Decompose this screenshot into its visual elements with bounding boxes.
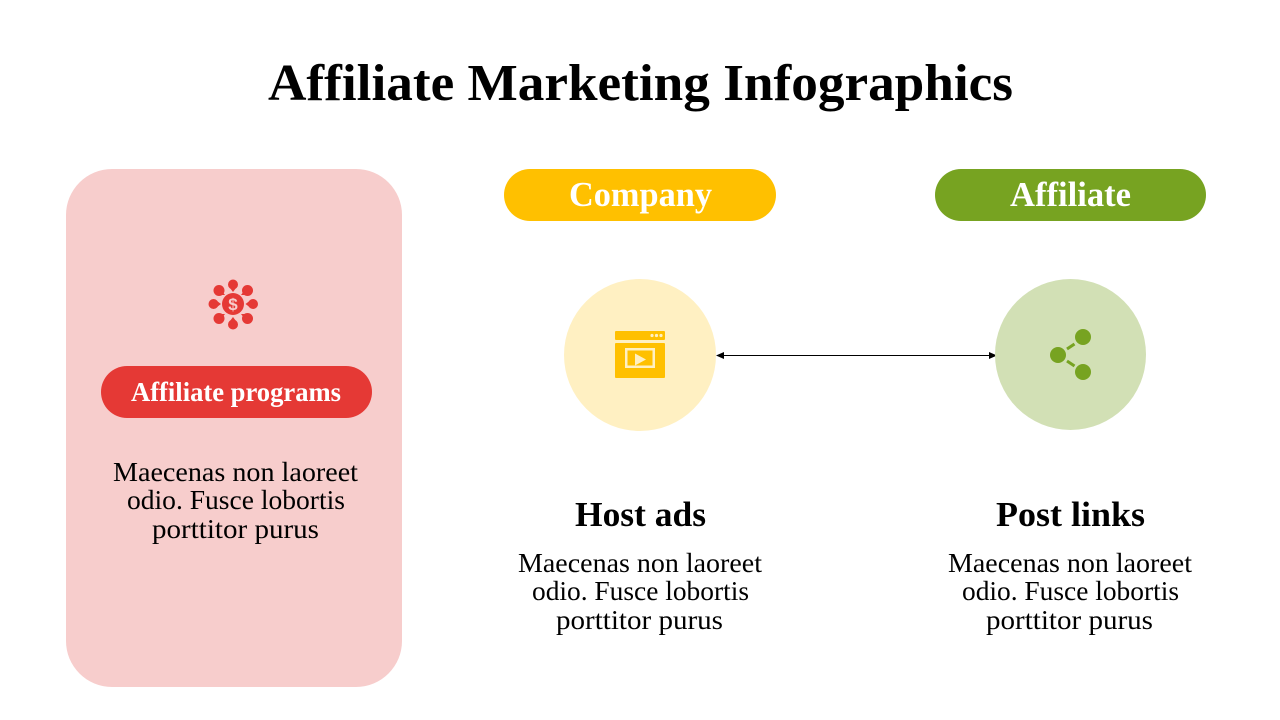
- heading: post links: Post links: [996, 495, 1145, 534]
- icon: video window in yellow circle: [564, 279, 716, 431]
- icon: share in green circle: [995, 279, 1146, 430]
- text block: host ads description: [518, 548, 763, 635]
- pill: affiliate: Affiliate: [1010, 175, 1131, 214]
- pill: company: Company: [569, 175, 712, 214]
- text block: affiliate programs description: porttitor purus: [152, 514, 319, 544]
- text block: affiliate programs description: [113, 457, 359, 544]
- text block: post links description: odio. Fusce lobortis: [962, 576, 1179, 606]
- text block: affiliate programs description: Maecenas non laoreet: [113, 457, 359, 487]
- pill: company: [504, 169, 776, 221]
- pill: affiliate programs: Affiliate programs: [131, 377, 341, 407]
- text block: affiliate programs description: odio. Fusce lobortis: [127, 485, 345, 515]
- arrow: two-way link: [716, 352, 997, 359]
- text block: post links description: [948, 548, 1193, 635]
- title: Affiliate Marketing Infographics: [268, 55, 1013, 112]
- pill: affiliate programs: [101, 366, 372, 418]
- heading: host ads: Host ads: [575, 495, 706, 534]
- text block: host ads description: porttitor purus: [556, 605, 723, 635]
- icon: money network: [208, 280, 258, 330]
- pill: affiliate: [935, 169, 1206, 221]
- panel: affiliate programs: [66, 169, 402, 687]
- text block: post links description: porttitor purus: [986, 605, 1153, 635]
- text block: post links description: Maecenas non laoreet: [948, 548, 1193, 578]
- text block: host ads description: odio. Fusce lobortis: [532, 576, 749, 606]
- text block: host ads description: Maecenas non laoreet: [518, 548, 763, 578]
- icon: money network: $: [228, 295, 238, 314]
